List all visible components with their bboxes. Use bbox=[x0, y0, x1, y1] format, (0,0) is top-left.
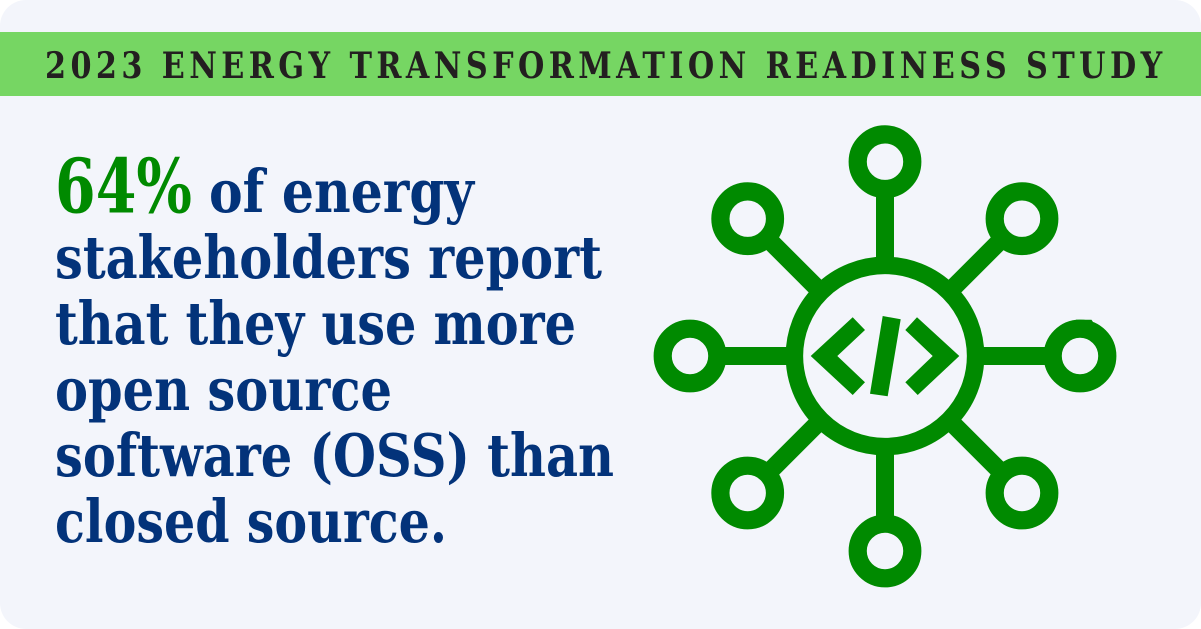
icon: code symbol bbox=[811, 316, 959, 396]
icon spokes bbox=[717, 188, 1053, 524]
text block: main statistic bbox=[55, 142, 614, 556]
text block: main statistic: of energy bbox=[209, 157, 475, 226]
heading band: 2023 ENERGY TRANSFORMATION READINESS STUDY bbox=[45, 44, 1163, 87]
heading band bbox=[0, 32, 1201, 96]
icon: open source code network bbox=[663, 134, 1107, 578]
text block: main statistic: software (OSS) than bbox=[55, 421, 614, 490]
icon outer nodes bbox=[663, 134, 1107, 578]
text block: main statistic: that they use more bbox=[55, 289, 576, 358]
icon central circle bbox=[794, 265, 976, 447]
statistic: 64%: 64% bbox=[55, 142, 192, 230]
text block: main statistic: open source bbox=[55, 355, 392, 424]
text block: main statistic: stakeholders report bbox=[55, 223, 602, 292]
text block: main statistic: closed source. bbox=[55, 487, 447, 556]
icon: node tick bbox=[1076, 320, 1093, 322]
